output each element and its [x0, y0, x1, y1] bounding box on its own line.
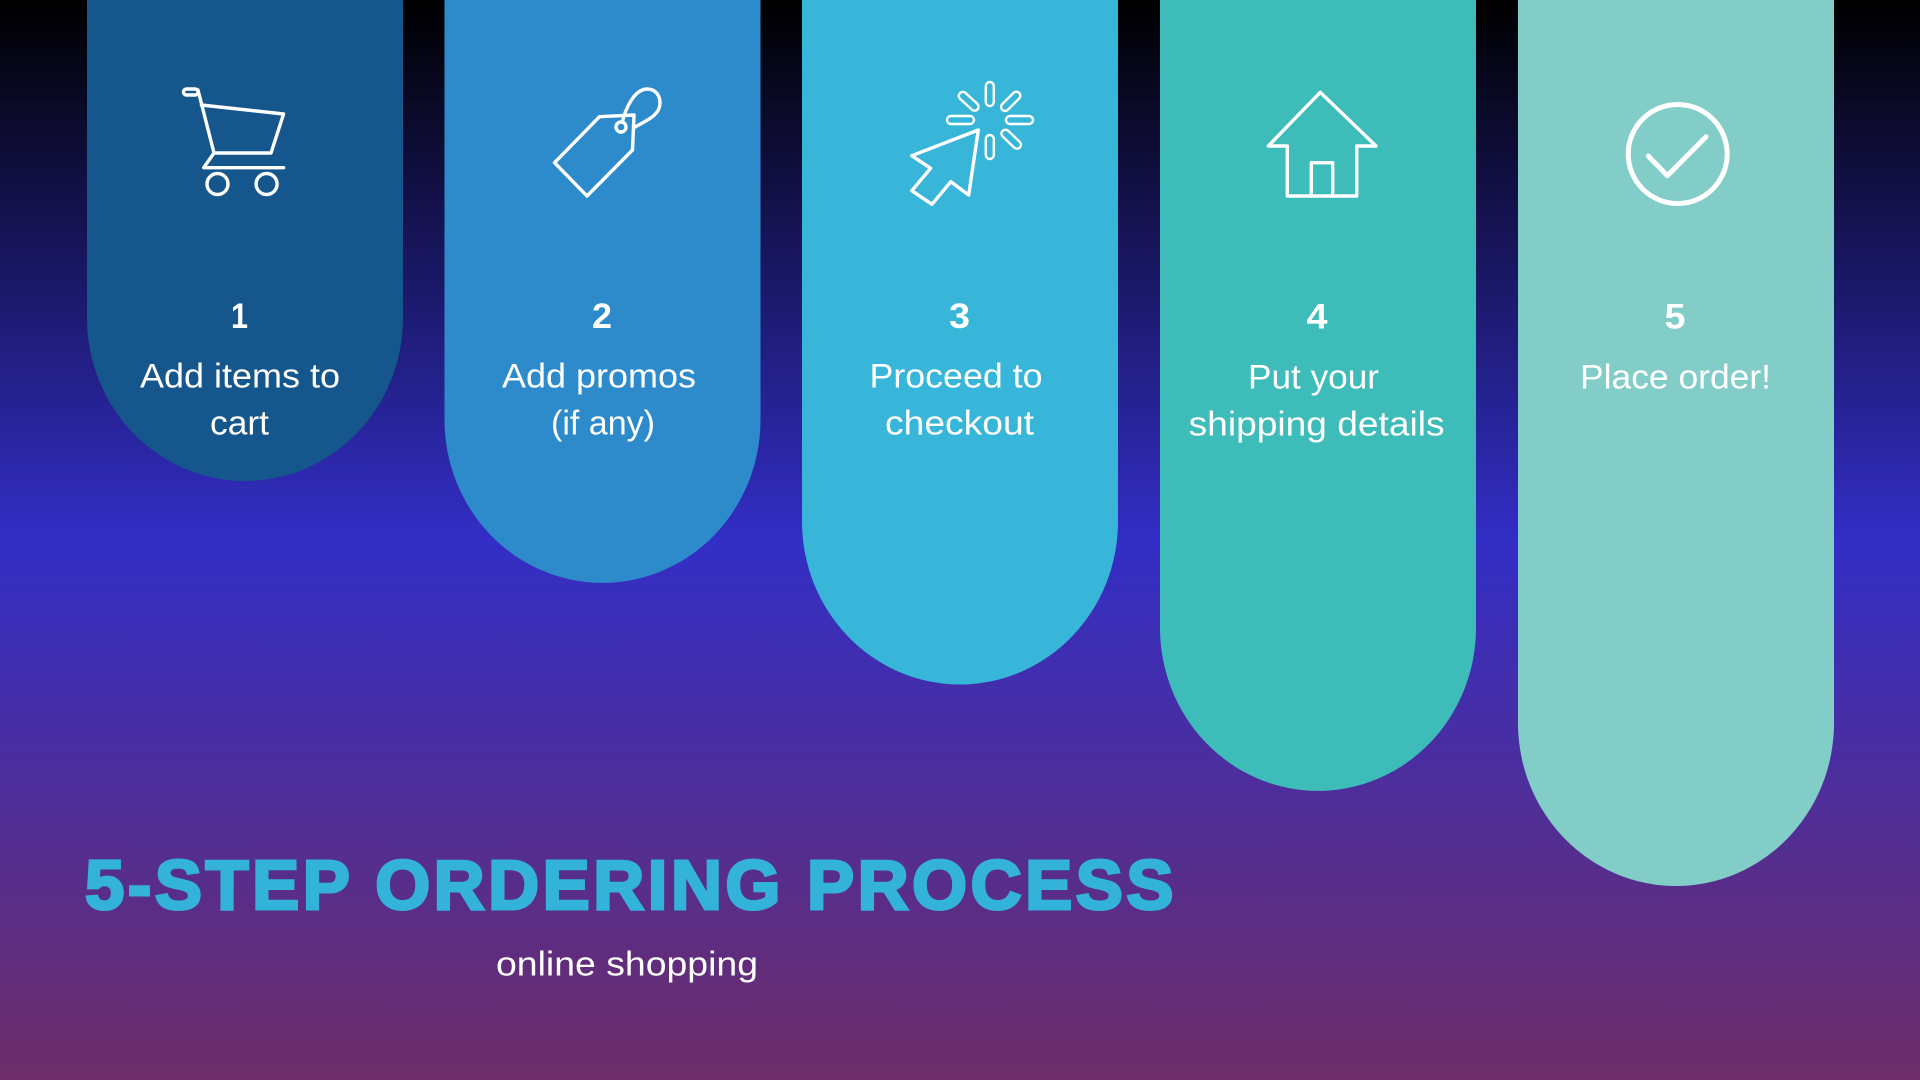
step 2 label: Add promos — [502, 358, 696, 396]
step 3 label: checkout — [885, 404, 1034, 442]
step number 2: 2 — [592, 297, 612, 336]
step 2 label: (if any) — [551, 404, 655, 442]
icon: cursor click — [912, 82, 1033, 204]
step 1 label: Add items to — [140, 358, 340, 396]
step number 3: 3 — [949, 297, 970, 336]
icon: check circle — [1628, 104, 1727, 204]
step 4 label: Put your — [1248, 358, 1379, 396]
title: 5-STEP ORDERING PROCESS — [85, 846, 1177, 924]
step number 4: 4 — [1306, 298, 1328, 336]
step number 1: 1 — [231, 297, 248, 336]
icon: house — [1268, 92, 1376, 196]
step number 5: 5 — [1664, 298, 1686, 336]
panel: step 2 add promos — [444, 0, 760, 583]
pill shape 5 — [1518, 0, 1834, 886]
panel: step 3 proceed to checkout — [802, 0, 1118, 684]
pill shape 2 — [444, 0, 760, 583]
pill shape 3 — [802, 0, 1118, 684]
pill shape 4 — [1160, 0, 1476, 791]
step 1 label: cart — [210, 404, 269, 442]
subtitle: online shopping — [496, 946, 758, 984]
step 4 label: shipping details — [1189, 406, 1445, 444]
icon: price tag — [554, 89, 660, 196]
panel: step 1 add items to cart — [87, 0, 403, 481]
step 3 label: Proceed to — [870, 358, 1042, 396]
panel: step 4 shipping details — [1160, 0, 1476, 791]
pill shape 1 — [87, 0, 403, 481]
step 5 label: Place order! — [1580, 358, 1771, 396]
panel: step 5 place order — [1518, 0, 1834, 886]
icon: shopping cart — [184, 89, 284, 194]
